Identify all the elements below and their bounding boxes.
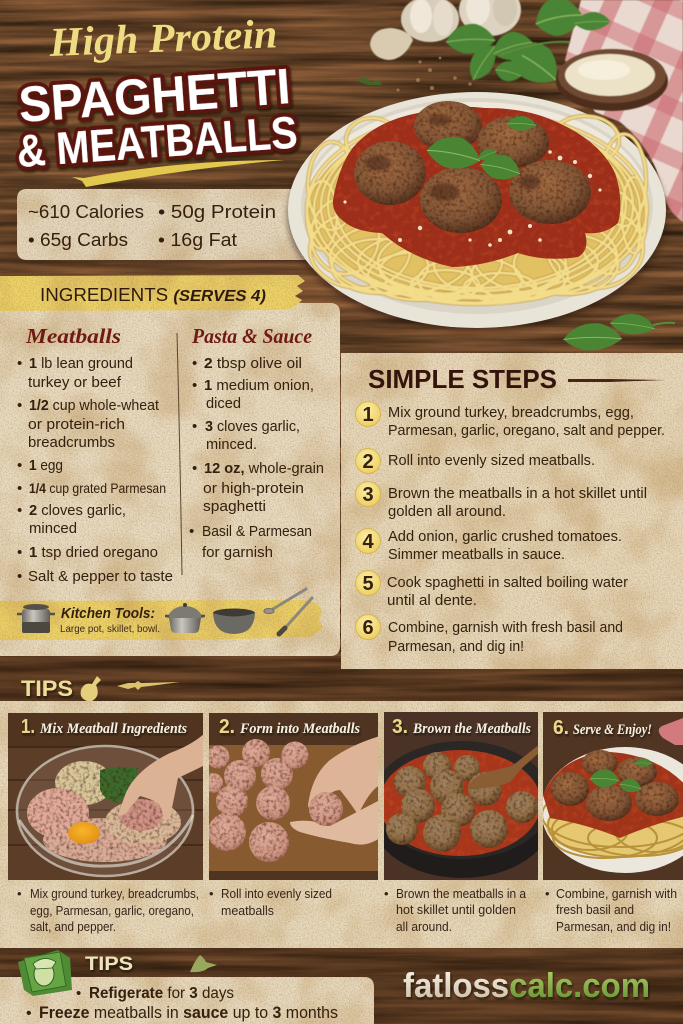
- script heading: High Protein: [48, 10, 278, 65]
- pasta heading: Pasta & Sauce: [191, 324, 312, 348]
- step 3: 3: [362, 484, 374, 506]
- step 5: Cook spaghetti in salted boiling water: [387, 574, 628, 591]
- heading meatballs: & MEATBALLS: [15, 106, 299, 177]
- pasta ingredient list: for garnish: [202, 544, 273, 561]
- sauce: [543, 752, 683, 838]
- caption: roll: [209, 886, 332, 918]
- caption: roll: •: [209, 886, 214, 901]
- step 1: Mix ground turkey, breadcrumbs, egg,: [388, 404, 634, 421]
- meatball ingredient list: turkey or beef: [28, 374, 122, 391]
- caption: roll: Roll into evenly sized: [221, 886, 332, 901]
- step 5: until al dente.: [387, 592, 477, 609]
- fat: • 16g Fat: [158, 230, 237, 250]
- crumbs and herbs on table: [355, 57, 472, 92]
- photo: brown meatballs: [384, 712, 538, 880]
- meatball ingredient list: •: [17, 502, 22, 519]
- parmesan flecks on sauce: [343, 150, 602, 247]
- underline swoosh: [72, 160, 285, 187]
- kitchen tools heading: Kitchen Tools:: [61, 605, 155, 622]
- meatball ingredient list: 1 lb lean ground: [29, 355, 133, 372]
- icon: green chef badge: [18, 950, 72, 996]
- meatball ingredient list: 1/4 cup grated Parmesan: [29, 480, 166, 496]
- darker wood bands: [0, 656, 683, 1024]
- refrigerate tip: Refigerate for 3 days: [89, 985, 234, 1002]
- hand: [118, 733, 205, 820]
- meatball ingredient list: breadcrumbs: [28, 434, 115, 451]
- meatball ingredient list: •: [17, 457, 22, 474]
- step 6: Parmesan, and dig in!: [388, 638, 524, 655]
- raw meatballs: [203, 739, 308, 862]
- caption: combine: Combine, garnish with: [556, 886, 677, 901]
- caption: brown: all around.: [396, 919, 452, 934]
- garlic bulbs: [370, 0, 521, 60]
- website logo: fatlosscalc.com: [403, 967, 650, 1005]
- step 4: [356, 528, 622, 563]
- step 3: Brown the meatballs in a hot skillet until: [388, 485, 647, 502]
- meatball ingredient list: •: [17, 355, 22, 372]
- photo: form meatballs: [209, 713, 378, 880]
- parmesan bowl: [556, 49, 668, 111]
- food scene: garlic, basil, parmesan and napkin: [355, 0, 683, 222]
- plate: [287, 100, 667, 332]
- step 6: 6: [362, 617, 374, 639]
- icon: fork flourish: [117, 681, 180, 690]
- title: [15, 10, 299, 187]
- meatball ingredient list: •: [17, 568, 22, 585]
- plate of spaghetti and meatballs: [287, 92, 667, 332]
- pasta ingredient list: 12 oz, whole-grain: [204, 460, 324, 477]
- tips strip heading: [21, 676, 180, 704]
- step 5: [356, 570, 628, 609]
- icon: leaf sprig: [190, 955, 217, 972]
- pasta ingredient list: 2 tbsp olive oil: [204, 355, 302, 372]
- freeze tip: •: [26, 1005, 32, 1022]
- photo: form meatballs: Form into Meatballs: [239, 721, 360, 737]
- step 3: [356, 482, 647, 520]
- checked napkin: [565, 0, 683, 222]
- ingredients heading: INGREDIENTS (SERVES 4): [40, 285, 266, 305]
- meatball ingredient list: •: [17, 480, 22, 497]
- pasta: [546, 794, 683, 858]
- meatball ingredient list: •: [17, 397, 22, 414]
- step 1: Parmesan, garlic, oregano, salt and pepper.: [388, 422, 665, 439]
- step 3: golden all around.: [388, 503, 506, 520]
- step 4: 4: [362, 531, 374, 553]
- photo title: 2.: [219, 716, 235, 738]
- meatball ingredient list: [17, 355, 173, 585]
- step 6: Combine, garnish with fresh basil and: [388, 619, 623, 636]
- meatball ingredient list: •: [17, 544, 22, 561]
- step 6: [356, 614, 623, 655]
- basil: [590, 769, 619, 787]
- tomato sauce: [333, 107, 620, 267]
- loose basil leaves: [563, 312, 675, 352]
- photo title: 3.: [392, 716, 408, 738]
- heading rule: [568, 379, 665, 382]
- meatball ingredient list: 1 tsp dried oregano: [29, 544, 158, 561]
- panel: storage tips: [0, 950, 374, 1024]
- spaghetti: [307, 112, 647, 304]
- step 1: [356, 402, 665, 439]
- freeze tip: Freeze meatballs in sauce up to 3 months: [39, 1004, 338, 1022]
- caption: brown: [384, 886, 527, 934]
- icon: stock pot: [17, 604, 55, 633]
- pasta ingredient list: minced.: [206, 436, 257, 453]
- caption: combine: Parmesan, and dig in!: [556, 919, 671, 934]
- protein: • 50g Protein: [158, 202, 276, 222]
- panel: ingredients: [0, 275, 340, 656]
- column divider: [177, 333, 182, 575]
- napkin corner: [659, 718, 683, 745]
- meatballs: [551, 750, 679, 821]
- step 4: Simmer meatballs in sauce.: [388, 546, 565, 563]
- photo: brown meatballs: Brown the Meatballs: [412, 721, 531, 737]
- kitchen tools banner: [0, 600, 323, 640]
- pasta ingredient list: [189, 355, 324, 561]
- nutrition panel: [17, 189, 320, 260]
- pasta ingredient list: •: [192, 377, 197, 394]
- caption: combine: [545, 886, 677, 934]
- tips heading: TIPS: [85, 954, 133, 975]
- tips strip heading: TIPS: [21, 676, 73, 701]
- calories: ~610 Calories: [28, 202, 144, 222]
- pasta ingredient list: •: [192, 418, 197, 435]
- basil on top: [425, 116, 536, 183]
- photo: serve and enjoy: [543, 712, 683, 880]
- caption: mix: Mix ground turkey, breadcrumbs,: [30, 886, 199, 901]
- kitchen tools list: Large pot, skillet, bowl.: [60, 623, 160, 635]
- plate: [541, 747, 683, 873]
- caption: mix: [17, 886, 199, 934]
- pasta ingredient list: 3 cloves garlic,: [205, 418, 300, 435]
- step 2: [356, 448, 595, 474]
- sauce: [379, 750, 541, 856]
- step 1: 1: [362, 404, 374, 426]
- pasta ingredient list: diced: [206, 395, 241, 412]
- wooden spoon: [468, 744, 540, 788]
- caption: brown: hot skillet until golden: [396, 902, 516, 917]
- icon: saucepan: [165, 603, 205, 633]
- caption: roll: meatballs: [221, 903, 274, 918]
- meatball ingredient list: 1/2 cup whole-wheat: [29, 397, 160, 414]
- carbs: • 65g Carbs: [28, 230, 128, 250]
- skillet: [370, 752, 554, 878]
- icon: bowl: [213, 608, 255, 634]
- icon: tongs: [264, 589, 312, 634]
- steps heading: SIMPLE STEPS: [368, 364, 557, 394]
- caption: mix: egg, Parmesan, garlic, oregano,: [30, 903, 194, 918]
- refrigerate tip: •: [76, 985, 81, 1002]
- caption: mix: salt, and pepper.: [30, 919, 116, 934]
- meatball ingredient list: minced: [29, 520, 77, 537]
- meatball ingredient list: or protein-rich: [28, 416, 125, 433]
- pasta ingredient list: Basil & Parmesan: [202, 523, 312, 540]
- caption: combine: •: [545, 886, 550, 901]
- photo: serve and enjoy: Serve & Enjoy!: [573, 722, 652, 738]
- heading spaghetti: SPAGHETTI: [17, 58, 292, 133]
- pasta ingredient list: •: [192, 460, 197, 477]
- photo: mix ingredients: [8, 713, 203, 880]
- glass bowl: [15, 745, 195, 877]
- hands with meatball: [308, 736, 380, 815]
- step 2: 2: [362, 451, 374, 473]
- pasta ingredient list: •: [192, 355, 197, 372]
- panel: simple steps: [341, 353, 683, 669]
- pasta ingredient list: •: [189, 523, 194, 540]
- browned meatballs: [386, 752, 538, 852]
- caption: combine: fresh basil and: [556, 902, 634, 917]
- pasta ingredient list: or high-protein: [203, 480, 304, 497]
- icon: chicken: [81, 676, 101, 704]
- meatball ingredient list: Salt & pepper to taste: [28, 568, 173, 585]
- meatball ingredient list: 2 cloves garlic,: [29, 502, 126, 519]
- meatballs: [354, 101, 591, 233]
- browned tops of meatballs: [365, 114, 541, 201]
- photo title: 6.: [553, 717, 569, 739]
- photo: mix ingredients: Mix Meatball Ingredients: [39, 721, 187, 737]
- step 5: 5: [362, 573, 374, 595]
- pasta ingredient list: spaghetti: [203, 498, 266, 515]
- panel: photo steps: [0, 701, 683, 948]
- step 2: Roll into evenly sized meatballs.: [388, 452, 595, 469]
- photo title: 1.: [21, 716, 35, 738]
- pasta ingredient list: 1 medium onion,: [204, 377, 314, 394]
- step 4: Add onion, garlic crushed tomatoes.: [388, 528, 622, 545]
- ingredients banner: [0, 275, 305, 311]
- meatball ingredient list: 1 egg: [29, 457, 63, 474]
- caption: brown: Brown the meatballs in a: [396, 886, 527, 901]
- basil bunch: [445, 0, 611, 93]
- caption: brown: •: [384, 886, 389, 901]
- egg yolk: [68, 822, 100, 844]
- caption: mix: •: [17, 886, 22, 901]
- meatballs heading: Meatballs: [25, 324, 121, 348]
